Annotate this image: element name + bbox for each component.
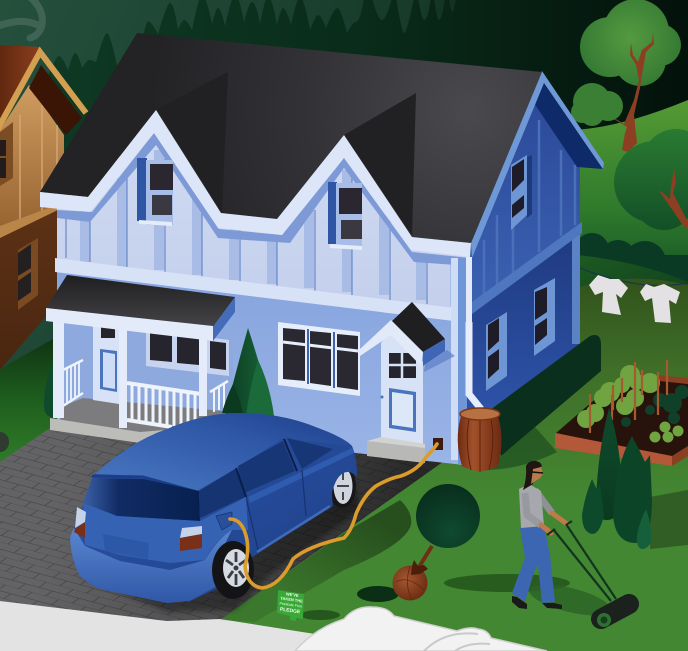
porch right railing (210, 381, 228, 412)
dormer shadow 2 (344, 93, 416, 236)
topiary ball (416, 484, 480, 548)
car roof (95, 413, 350, 491)
front wall battens (80, 150, 460, 306)
mower shadow (526, 578, 614, 622)
corner post side (458, 258, 467, 464)
charge port door (216, 512, 232, 530)
wall mid band (55, 258, 470, 323)
bed soil (556, 376, 688, 458)
side panel highlight (248, 448, 354, 503)
upper corner trim (466, 257, 472, 323)
foundation conifers (222, 328, 274, 416)
roof rear edge (92, 476, 197, 492)
neighbour soffit (29, 65, 82, 135)
entry roof edge (423, 339, 445, 366)
sidewalk (0, 601, 315, 651)
shadow under gable trim (57, 133, 470, 266)
porch window (146, 329, 229, 376)
foundation hedge (490, 335, 601, 456)
neighbour window lower (18, 238, 38, 310)
side lower window right (534, 278, 555, 356)
entry roof shadow (424, 350, 455, 372)
plants (577, 365, 660, 428)
neighbour house (0, 45, 86, 370)
quarter window (199, 469, 247, 518)
neighbour siding lines (20, 105, 57, 226)
topiary tree (357, 484, 570, 602)
porch roof (46, 275, 235, 327)
side upper window (511, 155, 532, 230)
page curve (424, 633, 490, 651)
shadow on lawn from car (220, 500, 411, 622)
front window (287, 438, 333, 469)
porch step (50, 418, 165, 443)
front wall upper (57, 130, 470, 312)
dark leafy plants (621, 385, 688, 427)
neighbour roof trim (0, 52, 86, 132)
side lower window left (486, 312, 507, 391)
porch roof side (213, 297, 235, 341)
pledge sign (277, 590, 340, 621)
dormer shadow 1 (157, 72, 228, 213)
porch floor (60, 398, 233, 442)
mower handles (547, 521, 616, 601)
terracotta pot (392, 560, 428, 600)
entry gable trim (359, 320, 423, 366)
neighbour roof (0, 45, 40, 128)
main lawn right (220, 279, 688, 651)
tree 1 (580, 0, 681, 152)
entry door (380, 330, 423, 444)
porch columns (53, 316, 207, 428)
sign text: PLEDGE (279, 607, 301, 615)
side corner post (572, 232, 580, 344)
neighbour band (0, 203, 62, 238)
left lawn (0, 335, 60, 463)
driveway (0, 428, 444, 621)
door rocker (257, 506, 330, 552)
porch (44, 275, 235, 443)
porch roof trim (46, 308, 213, 341)
electric car (70, 413, 360, 612)
window pillars (236, 439, 297, 497)
porch door (93, 324, 119, 404)
bed right face (672, 446, 688, 466)
sign shadow (300, 610, 340, 620)
driveway shading (0, 428, 444, 621)
pot shadow (357, 586, 399, 602)
neighbour upper wall (0, 85, 64, 236)
rear wheel (212, 541, 254, 599)
sign text: WE'VE (286, 591, 299, 598)
hair (523, 461, 542, 490)
dormer window 1 (137, 158, 173, 226)
forest tree line (30, 0, 688, 160)
shirt 2 (640, 284, 680, 323)
rear bumper (70, 528, 232, 603)
dormer window 2 (328, 182, 362, 250)
paver surface (0, 428, 444, 621)
porch middle railing (127, 383, 201, 427)
neighbour window upper (0, 122, 13, 186)
clothesline (580, 268, 688, 285)
person with reel mower (512, 461, 629, 627)
dark hedge row (575, 233, 688, 296)
small cabbages (650, 422, 684, 442)
tail light left (74, 507, 86, 538)
side soffit (534, 83, 603, 169)
rear lawn shadow (650, 490, 688, 549)
shrub beside porch (44, 360, 53, 418)
car body (70, 413, 357, 603)
car shadow (80, 485, 360, 612)
front wall batten lines (66, 150, 427, 304)
main house (40, 33, 604, 465)
far arm (535, 490, 567, 524)
charging cable (230, 444, 437, 588)
bed back rim (622, 372, 688, 384)
far front wheel (328, 464, 356, 508)
tail light right (180, 526, 202, 551)
raised garden bed (555, 360, 688, 466)
main roof (40, 33, 542, 243)
porch left railing (63, 360, 83, 406)
downspout (469, 322, 481, 409)
license plate recess (103, 534, 149, 559)
jeans (512, 526, 555, 603)
shoes (512, 596, 562, 609)
sign text: Pesticide Free (279, 601, 303, 609)
sign text (278, 591, 304, 616)
face (531, 467, 543, 484)
smoke curl (0, 0, 42, 38)
middle window (238, 441, 295, 494)
torso (519, 484, 544, 528)
side wall lower (462, 233, 580, 430)
sign text: TAKEN THE (280, 595, 303, 604)
mower roller (597, 604, 629, 627)
porch back wall (60, 318, 233, 415)
rain barrel (458, 408, 502, 472)
white book page edge (295, 607, 547, 651)
door seam (246, 470, 306, 550)
small bush tree (571, 83, 623, 126)
neighbour lower wall (0, 206, 60, 370)
rear window (83, 478, 200, 521)
front shrubs (582, 408, 652, 549)
sign board (277, 590, 304, 621)
green hill (572, 100, 688, 300)
left lawn planter (0, 432, 9, 452)
side wall battens (484, 120, 575, 296)
charge socket (433, 438, 443, 450)
roof fascia trim (40, 110, 471, 257)
mid lawn strip (578, 255, 688, 310)
hill and back lawn (571, 0, 688, 310)
side rake trim (471, 71, 604, 258)
bed front face (555, 433, 672, 466)
topiary ground shadow (444, 574, 570, 592)
corner post (451, 258, 458, 460)
shirt 1 (589, 275, 628, 315)
tree 3 (614, 129, 688, 230)
glasses (532, 472, 543, 473)
entry gable roof (391, 302, 445, 352)
topiary stem (419, 546, 432, 567)
hedge shadow (490, 427, 557, 470)
near arm (525, 493, 551, 533)
side wall upper (462, 103, 580, 310)
side band (472, 222, 582, 314)
large window (278, 322, 360, 396)
front wall lower (57, 270, 466, 465)
entry step (367, 437, 425, 463)
rear hatch (83, 497, 248, 563)
stakes (590, 360, 667, 433)
